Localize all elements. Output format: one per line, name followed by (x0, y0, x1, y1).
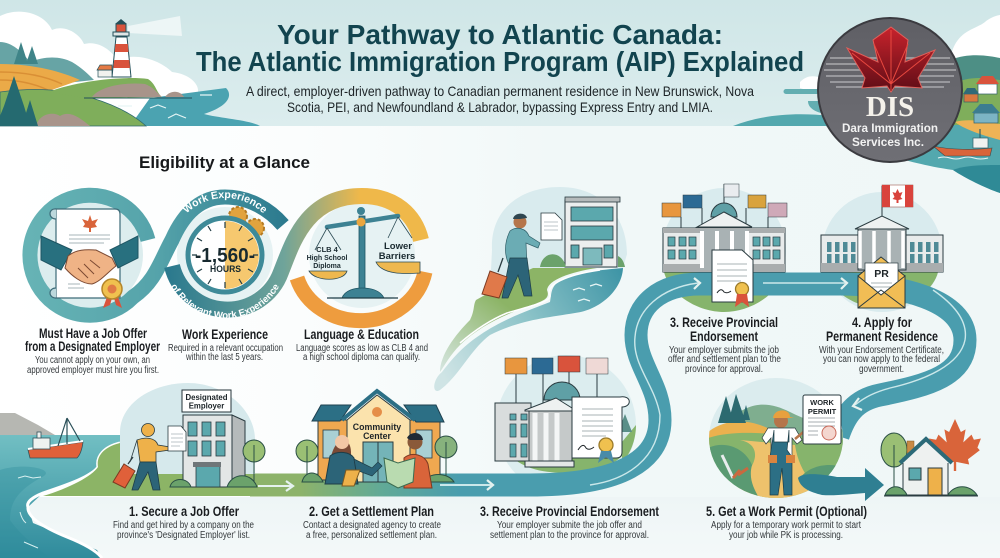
icon: PR envelope: PR (874, 268, 889, 280)
text block: step 3 lower (480, 503, 659, 541)
client with map (384, 433, 432, 488)
text block: step 5 (706, 503, 867, 541)
logo: Dara Immigration Services badge (818, 18, 962, 162)
header banner background (0, 0, 1000, 126)
work permit document (803, 395, 841, 444)
text block: step 4 permanent residence: With your Endorsement Certificate, (819, 345, 944, 356)
step icon: traveller at office (434, 187, 627, 391)
text block: step 3 lower: Your employer submite the job offer and (497, 520, 642, 531)
text block: language and education: a high school diploma can qualify. (303, 352, 420, 363)
text block: step 3 provincial endorsement (668, 314, 781, 375)
icon: balance scale: Barriers (379, 251, 415, 262)
subtitle (246, 83, 754, 115)
icon: balance scale: High School (307, 255, 347, 262)
backdrop: upper provincial scene (662, 188, 786, 312)
text block: language and education: Language scores as low as CLB 4 and (296, 343, 428, 354)
icon: home with maple leaf (881, 419, 981, 496)
text block: step 2: a free, personalized settlement plan. (306, 530, 437, 541)
fishing boat (28, 418, 83, 458)
fishing boat (933, 129, 992, 159)
text block: work experience (168, 326, 283, 363)
icon: handshake over certificate (41, 209, 138, 308)
title (196, 19, 804, 77)
backdrop: federal scene (822, 192, 942, 312)
subtitle: A direct, employer-driven pathway to Canadian permanent residence in New Brunswick, Nova (246, 83, 754, 99)
work permit document: PERMIT (808, 407, 837, 416)
text block: step 3 provincial endorsement: Your employer submits the job (669, 345, 779, 356)
settlement advisor (325, 435, 382, 486)
text block: step 4 permanent residence: Permanent Residence (826, 328, 938, 344)
text block: job offer (25, 325, 160, 376)
text block: job offer: Must Have a Job Offer (39, 325, 147, 341)
subtitle: Scotia, PEI, and Newfoundland & Labrador, bypassing Express Entry and LMIA. (287, 99, 713, 115)
text block: step 4 permanent residence: 4. Apply for (852, 314, 912, 330)
icon: maple leaf (847, 27, 935, 92)
text block: step 4 permanent residence: government. (859, 364, 904, 375)
sign: Employer (189, 402, 224, 410)
text block: step 2: 2. Get a Settlement Plan (309, 503, 434, 519)
text block: work experience: within the last 5 years. (185, 352, 263, 363)
step 2 icon: community center and people: Center (363, 431, 392, 441)
heading: eligibility: Eligibility at a Glance (139, 153, 310, 172)
text block: step 3 provincial endorsement: 3. Receive Provincial (670, 314, 778, 330)
icon: balance scale: Diploma (313, 263, 341, 270)
text block: language and education: Language & Education (304, 326, 419, 342)
text block: step 4 permanent residence: you can now apply to the federal (823, 354, 940, 365)
text block: step 1 (113, 503, 254, 541)
step 4 icon: federal building and envelope (821, 185, 943, 308)
arrow: ribbon to home (798, 468, 884, 501)
step 2 icon: community center and people (296, 391, 457, 488)
logo: Dara Immigration Services badge: Dara Immigration (842, 123, 938, 135)
icon: 1,560 hours gauge: HOURS (210, 264, 241, 275)
ribbon label: relevant work experience: of Relevant Work Experience (172, 284, 278, 318)
pale lower band (0, 497, 1000, 558)
text block: step 1: Find and get hired by a company on the (113, 520, 254, 531)
text block: step 3 lower: settlement plan to the province for approval. (490, 530, 649, 541)
bay with boat (0, 413, 120, 558)
text block: job offer: You cannot apply on your own, an (35, 355, 150, 366)
sign: Designated (185, 393, 228, 402)
ribbon label: work experience: Work Experience (182, 191, 266, 212)
text block: work experience: Work Experience (182, 326, 268, 342)
text block: step 4 permanent residence (819, 314, 944, 375)
text block: step 2 (303, 503, 441, 541)
text block: step 3 provincial endorsement: province for approval. (685, 364, 763, 375)
logo: Dara Immigration Services badge: DIS (866, 91, 914, 123)
text block: step 5: your job while PK is processing. (729, 530, 843, 541)
step 5 icon: worker with permit (709, 378, 843, 498)
text block: job offer: from a Designated Employer (25, 338, 160, 354)
sign (182, 390, 231, 412)
traveller (482, 213, 562, 298)
text block: step 5: 5. Get a Work Permit (Optional) (706, 503, 867, 519)
text block: job offer: approved employer must hire you first. (27, 365, 159, 376)
icon: balance scale: CLB 4 (316, 245, 339, 254)
step 1 icon: employer building and applicant (113, 383, 265, 490)
text block: step 3 provincial endorsement: Endorsement (690, 328, 758, 344)
step 3 icon: provincial legislature and flags (662, 184, 787, 307)
icon: balance scale (307, 207, 420, 298)
text block: work experience: Required in a relevant occupation (168, 343, 283, 354)
illustration: right coastal scene (733, 15, 1000, 193)
text block: step 3 lower: 3. Receive Provincial Endorsement (480, 503, 659, 519)
text block: step 1: 1. Secure a Job Offer (129, 503, 239, 519)
backdrop: lower provincial scene (496, 355, 636, 495)
text block: step 1: province's 'Designated Employer' list. (117, 530, 250, 541)
eligibility ribbon (30, 195, 425, 321)
work permit document: WORK (810, 398, 834, 407)
step 3 icon: provincial building and certificate (495, 356, 629, 467)
main pathway ribbon (43, 283, 965, 496)
landscape vignette (709, 378, 843, 498)
text block: step 2: Contact a designated agency to create (303, 520, 441, 531)
title: The Atlantic Immigration Program (AIP) Explained (196, 46, 804, 77)
step 2 icon: community center and people: Community (353, 422, 401, 432)
applicant (113, 424, 186, 490)
title: Your Pathway to Atlantic Canada: (277, 19, 723, 50)
icon: 1,560 hours gauge: -1,560- (195, 245, 255, 267)
text block: step 3 provincial endorsement: offer and settlement plan to the (668, 354, 781, 365)
lighthouse (97, 19, 131, 77)
icon: balance scale: Lower (384, 241, 412, 252)
logo: Dara Immigration Services badge: Services Inc. (852, 137, 924, 149)
illustration: left coastal scene with lighthouse (0, 12, 260, 126)
text block: step 5: Apply for a temporary work permit to start (711, 520, 861, 531)
worker (762, 410, 807, 495)
icon: Canadian flag (882, 185, 913, 207)
text block: language and education (296, 326, 428, 363)
arrow: road chevrons (286, 278, 862, 491)
icon: 1,560 hours gauge (188, 207, 264, 292)
